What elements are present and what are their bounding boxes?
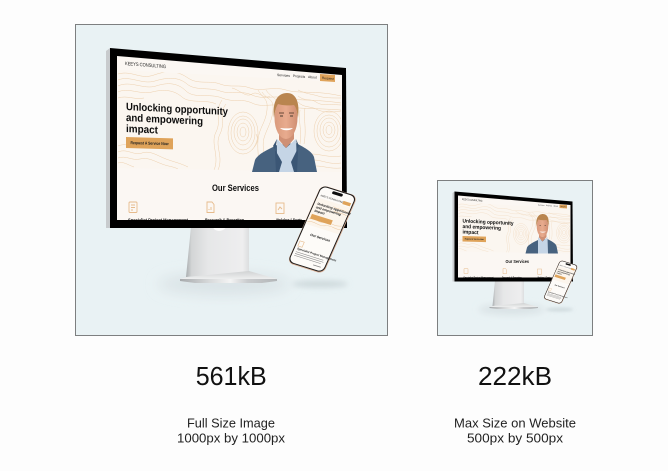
monitor header text: KEEYS CONSULTING [125,61,166,70]
label: full size file size: 561kB [196,363,267,391]
phone [287,185,364,276]
monitor stand [180,227,277,283]
small hero headline: and empowering [462,224,501,232]
small nav links [538,204,558,208]
small monitor stand [490,281,538,309]
caption: max size on website: Max Size on Website [454,416,576,430]
small monitor shadow [478,304,544,315]
small service labels: Research & Reporting [502,276,522,279]
monitor screen [117,56,342,220]
phone hero: Unlocking opportunity [317,202,352,216]
caption: full size image: 1000px by 1000px [177,432,286,446]
monitor nav links [277,73,317,80]
small phone: Our Services [554,284,565,289]
phone services heading: Our Services [309,233,331,243]
mockup: desktop monitor and phone [106,48,364,295]
small phone: and empowering [557,271,570,276]
small phone [543,260,582,306]
small service labels [464,276,551,279]
small service labels: Workshop & Events [538,276,551,279]
hero background with contour pattern [118,70,344,172]
service icons [129,202,284,214]
services heading: Our Services [212,183,259,194]
small phone shadow [546,308,574,311]
small phone: KEEYS CONSULTING [559,265,572,270]
caption: full size image [177,416,286,446]
portrait [252,93,317,172]
monitor nav links: About [308,75,317,80]
panel: website size image [438,180,592,336]
service labels: Research & Reporting [205,218,244,224]
small hero headline [462,219,514,238]
hero headline: Unlocking opportunity [126,101,228,118]
monitor nav button [320,74,335,82]
hero headline: and empowering [126,112,203,128]
small phone: Unlocking opportunity [558,268,575,276]
hero headline: impact [126,123,158,137]
phone notch [332,191,343,197]
panel: full size image [76,24,388,336]
hero headline [126,101,228,140]
small services heading: Our Services [506,259,529,265]
service labels: Specialist Project Management [128,218,188,224]
small phone: Specialist Project Management [548,290,568,299]
caption: max size on website [454,416,576,446]
small hero headline: impact [462,230,479,236]
phone header: KEEYS CONSULTING [320,194,344,204]
small phone: impact [556,271,563,276]
small hero background [458,202,572,254]
small monitor body [452,192,573,282]
monitor nav links: Services [277,73,290,78]
small header text: KEEYS CONSULTING [462,198,483,203]
small nav links: Projects [546,204,552,207]
monitor body [106,48,347,228]
label: website file size: 222kB [478,363,552,391]
small service labels: Specialist Project Management [464,276,494,279]
monitor shadow [158,273,290,295]
small nav links: About [554,205,558,208]
phone hero: impact [314,209,326,216]
service labels [128,218,302,224]
small nav button: Request [560,205,567,208]
caption: full size image: Full Size Image [187,416,275,430]
monitor nav button: Request [322,76,334,81]
hero button: Request A Service Now [130,140,169,146]
small portrait [526,214,558,254]
small service icons [464,268,542,274]
phone shadow [292,280,348,288]
small nav links: Services [538,204,545,207]
phone hero: and empowering [315,205,342,217]
monitor nav links: Projects [293,74,306,79]
mockup: small monitor and phone [452,192,582,315]
small hero button: Request A Service Now [465,238,484,241]
phone service card: Specialist Project Management [296,247,337,262]
phone hero [305,197,353,235]
caption: max size on website: 500px by 500px [467,432,564,446]
hero button [126,137,173,149]
service labels: Workshop & Events [276,218,302,224]
small hero headline: Unlocking opportunity [462,219,514,227]
